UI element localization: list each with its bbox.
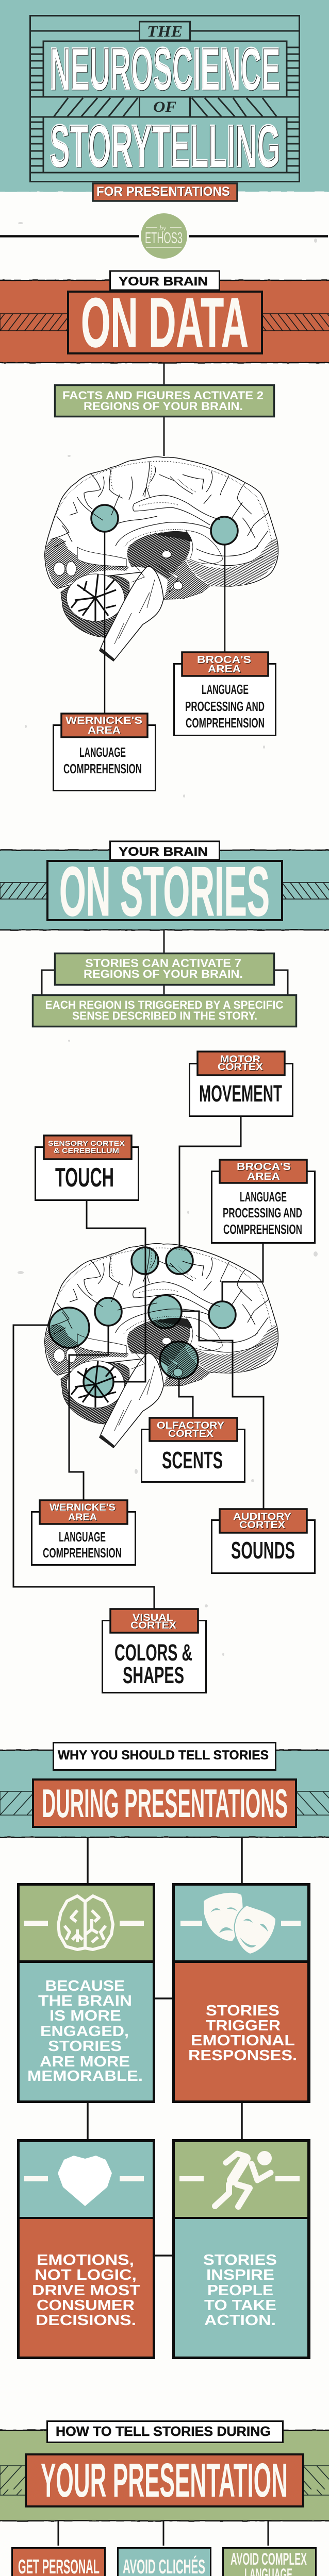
section header: your brain on data bbox=[0, 271, 329, 363]
card: olfactory cortex: SCENTS bbox=[162, 1447, 223, 1473]
card: avoid cliches bbox=[117, 2547, 211, 2576]
card: emotional responses: RESPONSES. bbox=[188, 2047, 297, 2064]
card: stories inspire: TO TAKE bbox=[204, 2297, 276, 2314]
hatch right bbox=[261, 314, 329, 331]
card: brain engaged: MEMORABLE. bbox=[27, 2068, 143, 2084]
card: brain engaged bbox=[17, 1883, 155, 2103]
card: wernicke's area stories: COMPREHENSION bbox=[43, 1545, 122, 1561]
brain illustration: stories bbox=[45, 1244, 278, 1448]
callout: facts and figures bbox=[55, 385, 274, 416]
card: emotional responses: EMOTIONAL bbox=[191, 2032, 295, 2049]
card: broca's area: PROCESSING AND bbox=[185, 699, 265, 714]
card: stories inspire: ACTION. bbox=[204, 2312, 276, 2329]
card: auditory cortex: AUDITORY bbox=[233, 1512, 291, 1522]
band bbox=[0, 850, 329, 930]
card: wernicke's area stories: WERNICKE'S bbox=[50, 1502, 116, 1513]
card: olfactory cortex: CORTEX bbox=[168, 1429, 213, 1439]
connectors: stories intro bbox=[42, 930, 288, 994]
icon: heart bbox=[58, 2156, 112, 2206]
card: broca's area stories bbox=[211, 1160, 315, 1243]
connector lines: data brain bbox=[105, 532, 225, 713]
card: emotions not logic: DRIVE MOST bbox=[32, 2282, 140, 2299]
card: visual cortex: COLORS & bbox=[114, 1639, 192, 1666]
card: brain engaged: STORIES bbox=[48, 2038, 122, 2055]
callout: facts and figures: FACTS AND FIGURES ACTIVATE 2 bbox=[62, 389, 264, 402]
card: wernicke's area stories bbox=[32, 1500, 135, 1565]
card: wernicke's area stories: AREA bbox=[68, 1512, 97, 1523]
card: wernicke's area: WERNICKE'S bbox=[65, 715, 142, 726]
your brain label: YOUR BRAIN bbox=[119, 845, 208, 859]
card: auditory cortex bbox=[211, 1509, 315, 1573]
callout: stories can activate: REGIONS OF YOUR BRAIN. bbox=[84, 968, 243, 980]
header panel bbox=[0, 0, 329, 192]
card: stories inspire: INSPIRE bbox=[206, 2267, 274, 2283]
card: sensory cortex: SENSORY CORTEX bbox=[48, 1139, 125, 1147]
card: wernicke's area stories: LANGUAGE bbox=[59, 1529, 106, 1545]
THE box bbox=[139, 22, 190, 40]
card: brain engaged: THE BRAIN bbox=[38, 1993, 132, 2009]
card: broca's area: COMPREHENSION bbox=[186, 715, 265, 731]
label: WHY YOU SHOULD TELL STORIES bbox=[58, 1748, 269, 1762]
card: broca's area: LANGUAGE bbox=[202, 682, 249, 697]
hatch right bbox=[282, 883, 329, 899]
band bbox=[0, 2430, 329, 2521]
card: motor cortex: CORTEX bbox=[218, 1062, 263, 1073]
card: emotions not logic: DECISIONS. bbox=[36, 2312, 136, 2329]
icon: runner bbox=[215, 2151, 272, 2207]
card: broca's area: BROCA'S bbox=[197, 654, 251, 666]
label bbox=[47, 2421, 283, 2442]
connectors: why cards bbox=[88, 1837, 242, 2256]
card: olfactory cortex: OLFACTORY bbox=[157, 1420, 224, 1431]
badge: by ethos3: ETHOS3 bbox=[145, 229, 183, 247]
callout: stories can activate: STORIES CAN ACTIVATE 7 bbox=[85, 957, 241, 970]
card: visual cortex: VISUAL bbox=[133, 1613, 173, 1623]
card: olfactory cortex bbox=[141, 1418, 244, 1482]
label bbox=[54, 1742, 275, 1770]
card: stories inspire: STORIES bbox=[203, 2252, 277, 2268]
card: emotions not logic bbox=[17, 2139, 155, 2359]
title frame bbox=[30, 15, 300, 181]
hatch left bbox=[0, 2466, 26, 2495]
THE box: THE bbox=[147, 22, 183, 40]
divider line bbox=[0, 235, 328, 238]
card: stories inspire bbox=[172, 2139, 310, 2359]
card: emotions not logic: CONSUMER bbox=[37, 2297, 135, 2314]
band bbox=[0, 280, 329, 363]
brain regions: data bbox=[91, 505, 238, 545]
hatch left bbox=[0, 314, 68, 331]
card: emotions not logic: NOT LOGIC, bbox=[35, 2267, 137, 2283]
connector lines: stories brain bbox=[13, 1117, 264, 1608]
card: auditory cortex: CORTEX bbox=[239, 1520, 285, 1531]
card: motor cortex: MOTOR bbox=[220, 1054, 260, 1065]
callout: each region: SENSE DESCRIBED IN THE STORY. bbox=[72, 1009, 257, 1022]
hatch left bbox=[0, 1791, 33, 1815]
card: brain engaged: IS MORE bbox=[50, 2008, 121, 2024]
your brain label bbox=[110, 271, 220, 290]
card: emotional responses: TRIGGER bbox=[206, 2018, 281, 2034]
card: avoid complex language bbox=[222, 2547, 317, 2576]
badge: by ethos3 bbox=[141, 213, 187, 259]
OF box bbox=[139, 97, 190, 117]
card: sensory cortex bbox=[35, 1136, 138, 1200]
card: wernicke's area bbox=[54, 714, 156, 790]
card: visual cortex bbox=[102, 1609, 206, 1693]
section header: your brain on stories bbox=[0, 841, 329, 930]
icon: theatre masks bbox=[204, 1893, 276, 1954]
hatch right bbox=[303, 2466, 329, 2495]
card: broca's area stories: BROCA'S bbox=[237, 1161, 291, 1173]
your brain label: YOUR BRAIN bbox=[119, 275, 208, 289]
icon: brain bbox=[58, 1896, 113, 1950]
card: emotional responses: STORIES bbox=[206, 2003, 279, 2019]
title box bbox=[68, 283, 262, 362]
hatch right bbox=[296, 1791, 329, 1815]
card: emotional responses bbox=[172, 1883, 310, 2103]
connectors: tips bbox=[58, 2521, 269, 2576]
card: motor cortex bbox=[190, 1052, 293, 1116]
for presentations ribbon: FOR PRESENTATIONS bbox=[96, 184, 230, 199]
card: stories inspire: PEOPLE bbox=[207, 2282, 273, 2299]
card: wernicke's area: AREA bbox=[88, 725, 121, 736]
card: visual cortex: SHAPES bbox=[123, 1662, 184, 1688]
card: brain engaged: ENGAGED, bbox=[40, 2023, 129, 2040]
card: brain engaged: BECAUSE bbox=[45, 1978, 125, 1994]
callout: each region bbox=[33, 995, 296, 1026]
your brain label bbox=[110, 841, 220, 860]
section header: how to tell stories bbox=[0, 2421, 329, 2521]
card: broca's area: AREA bbox=[208, 664, 241, 675]
card: broca's area bbox=[174, 652, 275, 736]
label: HOW TO TELL STORIES DURING bbox=[56, 2424, 271, 2439]
card: brain engaged: ARE MORE bbox=[40, 2054, 130, 2070]
hatch left bbox=[0, 883, 47, 899]
card: broca's area stories: AREA bbox=[247, 1171, 280, 1182]
card: broca's area stories: LANGUAGE bbox=[240, 1189, 287, 1205]
card: get personal bbox=[11, 2547, 106, 2576]
badge: by ethos3: by bbox=[159, 225, 167, 232]
brain illustration: data bbox=[45, 457, 278, 661]
card: sensory cortex: & CEREBELLUM bbox=[54, 1146, 119, 1155]
card: wernicke's area: LANGUAGE bbox=[79, 744, 126, 760]
connectors: data intro bbox=[163, 363, 165, 456]
callout: stories can activate bbox=[55, 953, 274, 985]
brain regions: stories bbox=[49, 1247, 236, 1397]
card: emotions not logic: EMOTIONS, bbox=[37, 2252, 134, 2268]
callout: facts and figures: REGIONS OF YOUR BRAIN. bbox=[84, 400, 243, 413]
callout: each region: EACH REGION IS TRIGGERED BY A SPECIFIC bbox=[45, 998, 284, 1011]
card: sensory cortex: TOUCH bbox=[55, 1163, 114, 1193]
OF box: OF bbox=[153, 98, 176, 115]
card: visual cortex: CORTEX bbox=[130, 1620, 176, 1631]
band bbox=[0, 1750, 329, 1837]
card: wernicke's area: COMPREHENSION bbox=[63, 761, 142, 776]
section header: why you should tell stories bbox=[0, 1742, 329, 1837]
